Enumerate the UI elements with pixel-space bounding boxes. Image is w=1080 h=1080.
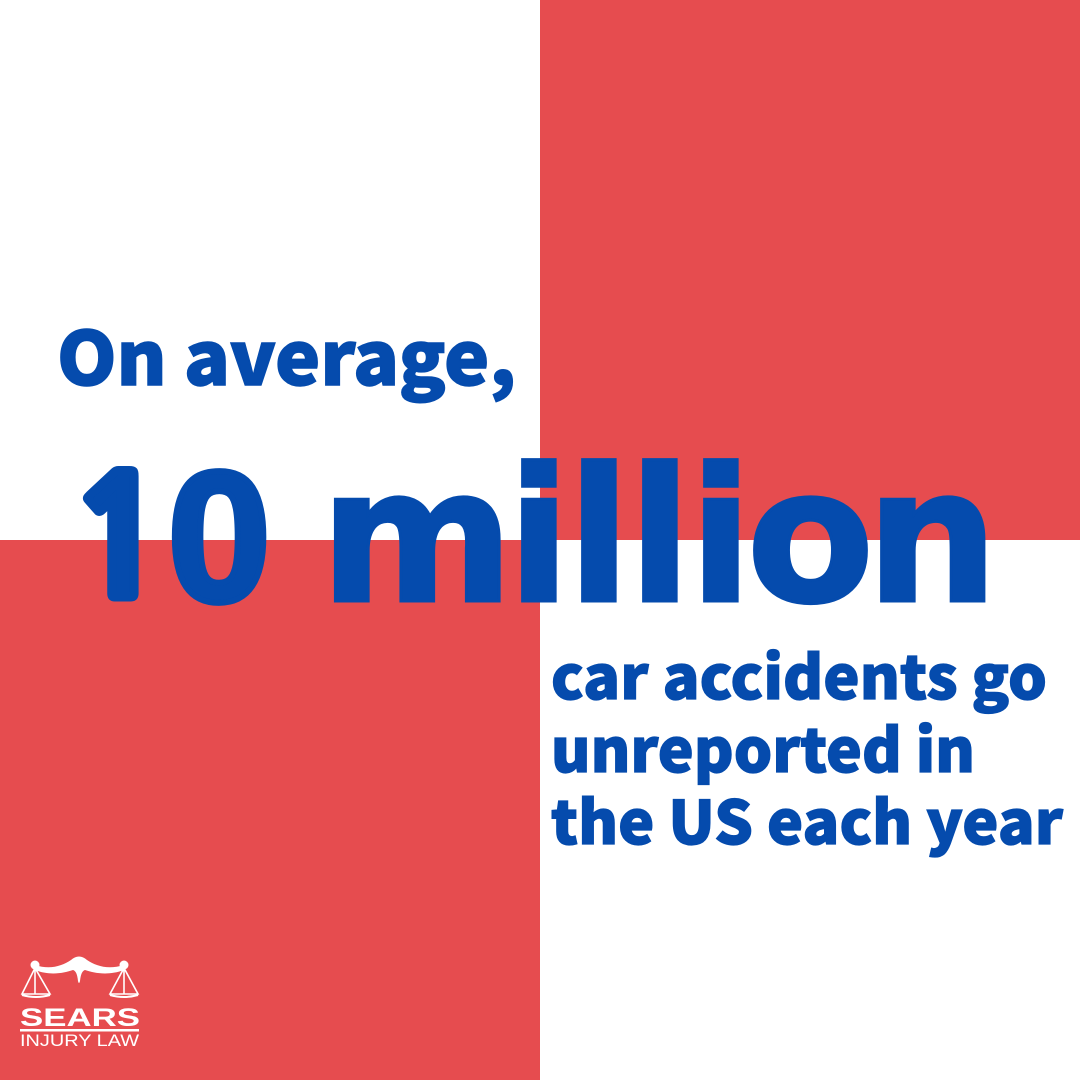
headline number: 10 million: 0 — [168, 434, 271, 641]
panel: top right red square — [540, 0, 1080, 540]
text block: car accidents statement: unreported in — [551, 703, 975, 790]
heading: on average: On average, — [57, 300, 516, 407]
logo: Sears Injury Law — [20, 956, 140, 1050]
logo wordmark: Injury Law: INJURY LAW — [20, 1032, 140, 1050]
text block: car accidents statement: the US each year — [551, 775, 1063, 862]
logo wordmark: SEARS: SEARS — [20, 1004, 140, 1032]
panel: bottom left red square — [0, 540, 540, 1080]
headline number: 10 million: million — [320, 428, 998, 645]
text block: car accidents statement — [551, 630, 1063, 862]
icon: scales of justice — [22, 956, 138, 997]
headline number: 10 million: 1 — [70, 458, 169, 620]
logo divider — [20, 1029, 139, 1032]
text block: car accidents statement: car accidents go — [551, 630, 1047, 717]
